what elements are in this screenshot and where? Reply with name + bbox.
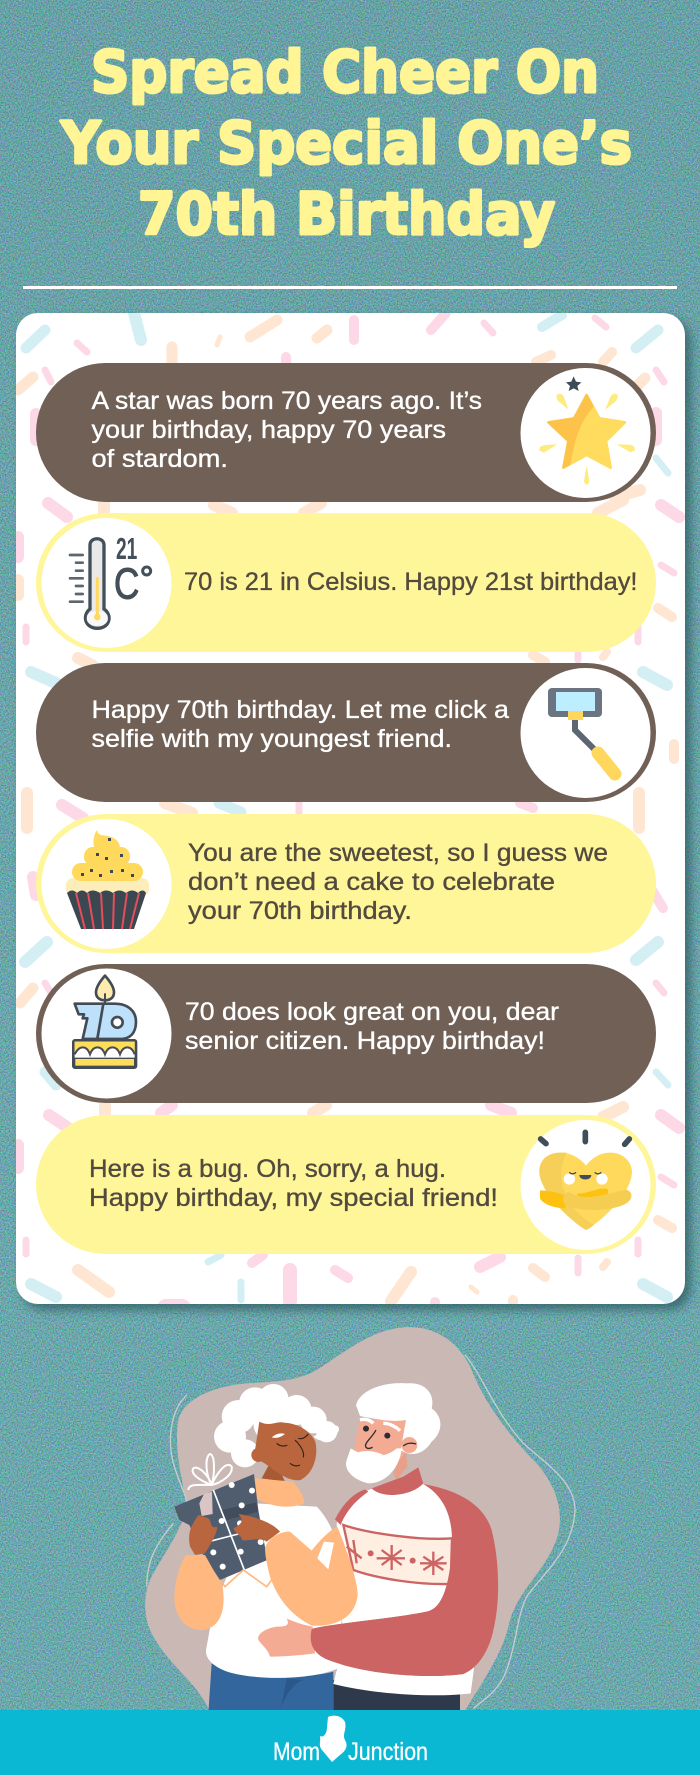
icon: thermometer: C — [114, 560, 139, 608]
icon: thermometer: 21 — [116, 532, 137, 566]
senior citizen message text: 70 does look great on you, dear — [185, 998, 559, 1026]
logo: MomJunction — [273, 1716, 428, 1766]
celsius message text: 70 is 21 in Celsius. Happy 21st birthday! — [184, 568, 638, 596]
message 4: cupcake — [36, 814, 656, 953]
icon: 70 cake — [73, 976, 136, 1068]
hug message text: Here is a bug. Oh, sorry, a hug. — [89, 1155, 446, 1183]
selfie message text — [92, 696, 509, 753]
title — [60, 38, 632, 248]
senior citizen message text — [185, 998, 559, 1055]
hug message text — [89, 1155, 498, 1212]
icon: star — [539, 376, 635, 484]
message 6: hug — [36, 1115, 656, 1254]
logo: MomJunction: Junction — [348, 1738, 428, 1766]
star message text: your birthday, happy 70 years — [92, 416, 446, 444]
message 5: cake — [36, 964, 656, 1103]
illustration: elderly couple with gift — [145, 1327, 575, 1713]
icon: selfie stick — [548, 688, 615, 774]
star message text: of stardom. — [92, 445, 228, 473]
icon: cupcake — [66, 830, 149, 929]
man — [333, 1383, 498, 1710]
cupcake message text: don’t need a cake to celebrate — [188, 868, 555, 896]
message 3: selfie — [36, 663, 656, 802]
panel: messages card — [16, 313, 691, 1310]
message 1: star — [36, 363, 656, 502]
title: Spread Cheer On — [91, 38, 599, 106]
woman — [174, 1384, 358, 1713]
star message text — [92, 387, 482, 473]
star message text: A star was born 70 years ago. It’s — [92, 387, 482, 415]
footer bar — [0, 1710, 700, 1775]
hands — [189, 1515, 217, 1555]
title: 70th Birthday — [138, 180, 555, 248]
senior citizen message text: senior citizen. Happy birthday! — [185, 1027, 545, 1055]
logo: MomJunction: Mom — [273, 1738, 320, 1766]
background blob — [145, 1327, 560, 1713]
sleeves — [174, 1555, 224, 1630]
icon: thermometer — [70, 532, 151, 628]
icon: hugging heart — [539, 1132, 632, 1230]
selfie message text: Happy 70th birthday. Let me click a — [92, 696, 509, 724]
title: Your Special One’s — [60, 109, 632, 177]
message 2: thermometer — [36, 513, 656, 652]
cupcake message text: You are the sweetest, so I guess we — [188, 839, 608, 867]
hug message text: Happy birthday, my special friend! — [89, 1184, 498, 1212]
cupcake message text: your 70th birthday. — [188, 897, 412, 925]
cupcake message text — [188, 839, 608, 925]
selfie message text: selfie with my youngest friend. — [92, 725, 452, 753]
man's arm and hand — [258, 1609, 493, 1676]
gift box — [174, 1454, 267, 1580]
